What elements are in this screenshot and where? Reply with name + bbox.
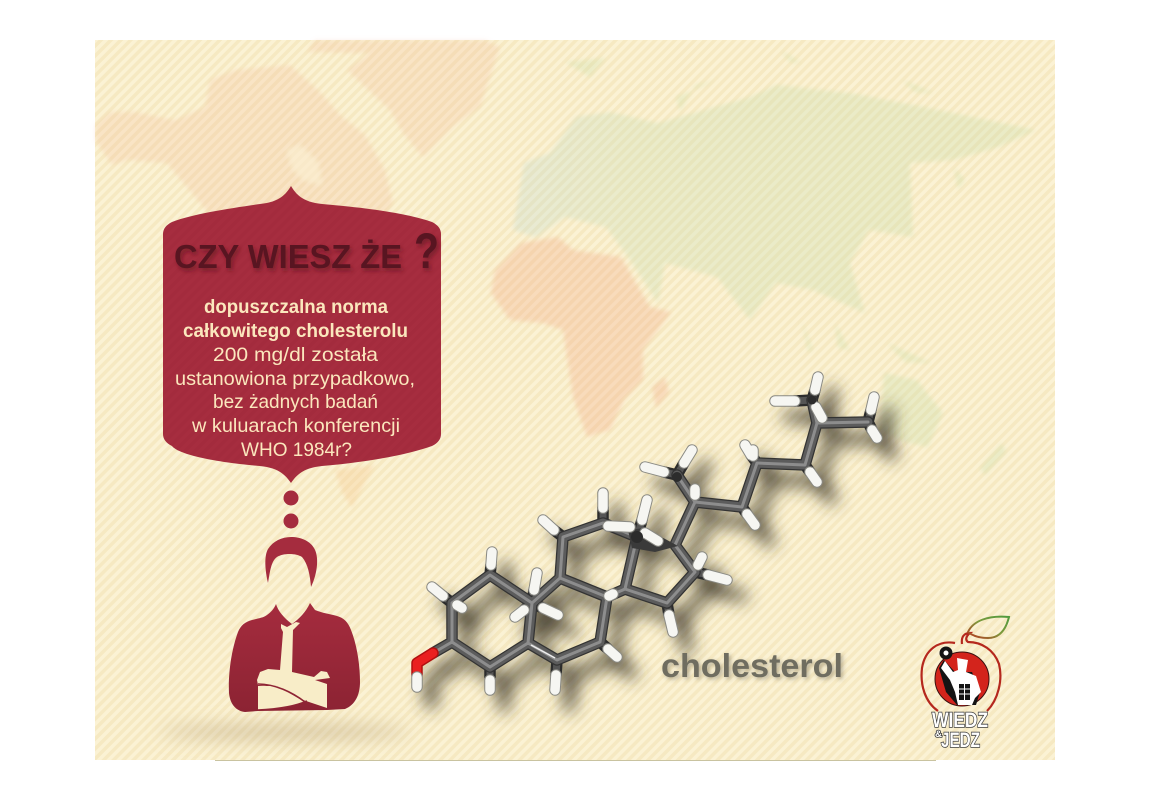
methyl wedge [628, 528, 678, 552]
heading shadow: ? [416, 226, 441, 282]
dark methyl carbons [631, 396, 816, 543]
bubble body text: 200 mg/dl została [213, 344, 378, 366]
map: Africa [491, 237, 671, 437]
logo wordmark: & [935, 729, 943, 739]
lower forearm [258, 686, 305, 710]
map: Arctic and Asian islands [565, 50, 965, 363]
apple outline [922, 633, 1000, 711]
heading: czy wiesz że: CZY WIESZ ŻE [174, 238, 402, 275]
label shadow: cholesterol [663, 649, 845, 686]
map: Eurasia [513, 85, 1036, 320]
leaf [968, 617, 1009, 638]
bubble body text: bez żadnych badań [213, 391, 378, 413]
map: New Zealand [980, 443, 1006, 475]
carbon skeleton [433, 400, 868, 667]
map: South America [335, 465, 375, 508]
map: Hudson Bay gap [287, 145, 322, 185]
bubble shape [163, 186, 441, 483]
heading shadow [176, 226, 441, 282]
map: North America [95, 65, 393, 215]
jacket [229, 603, 360, 712]
molecule shadow [431, 393, 891, 706]
logo wordmark [932, 709, 988, 752]
bubble body text [175, 296, 415, 461]
red medallion [935, 652, 989, 706]
map: Greenland [307, 40, 500, 157]
logo wordmark: WIEDZ [932, 709, 988, 732]
label: cholesterol: cholesterol [661, 647, 843, 684]
hydrogen bonds behind [443, 390, 872, 677]
bubble body text: całkowitego cholesterolu [183, 320, 408, 342]
arm fold line [258, 684, 327, 710]
panel: striped background [95, 40, 1055, 760]
bottom edge line [215, 760, 936, 761]
heading: question mark: ? [414, 223, 439, 279]
bubble body text: ustanowiona przypadkowo, [175, 368, 415, 390]
map: Madagascar [652, 377, 669, 408]
shirt, tie and arms [257, 622, 330, 708]
bodybuilder [939, 646, 981, 705]
double bond [531, 645, 555, 658]
bubble body text: w kuluarach konferencji [191, 415, 400, 437]
logo wordmark: JEDZ [941, 729, 980, 752]
speech bubble [163, 186, 441, 483]
thought dots [284, 490, 298, 528]
molecule: cholesterol [417, 377, 891, 706]
logo: Wiedz & Jedz [922, 617, 1009, 752]
bubble body text: WHO 1984r? [241, 439, 352, 461]
heading shadow: CZY WIESZ ŻE [176, 241, 404, 278]
hair [265, 537, 317, 587]
bubble stripes [163, 186, 441, 483]
bubble body text: dopuszczalna norma [204, 296, 388, 318]
icon: man with crossed arms [229, 537, 360, 712]
hydroxyl oxygen [417, 653, 433, 675]
person ground shadow [160, 725, 410, 739]
map: Australia [880, 373, 943, 447]
world map [95, 40, 1036, 508]
hydrogen atoms [417, 377, 877, 690]
